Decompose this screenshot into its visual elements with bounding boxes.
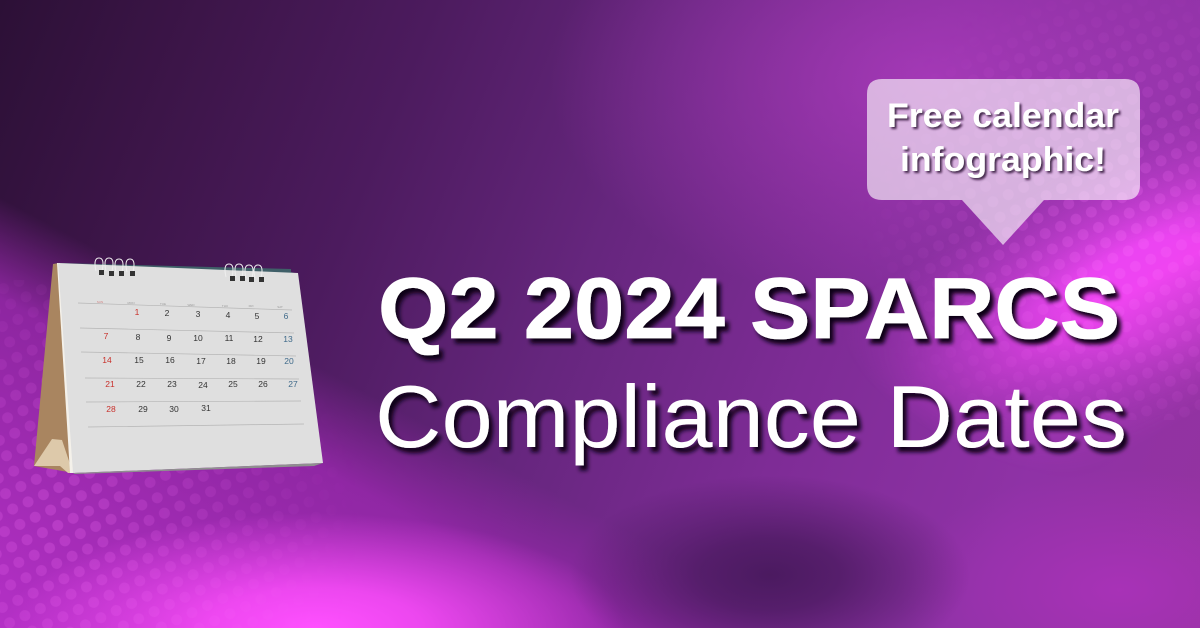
spiral bindings: [95, 258, 264, 282]
calendar dates: THU: [222, 304, 228, 308]
calendar dates: 3: [196, 309, 201, 319]
grid lines: [78, 303, 304, 427]
calendar dates: 7: [104, 331, 109, 341]
calendar dates: 12: [253, 334, 263, 344]
calendar dates: 21: [105, 379, 115, 389]
calendar dates: FRI: [249, 304, 254, 308]
calendar dates: 28: [106, 404, 116, 414]
calendar dates: 6: [284, 311, 289, 321]
calendar dates: 24: [198, 380, 208, 390]
calendar dates: 8: [136, 332, 141, 342]
calendar dates: 15: [134, 355, 144, 365]
title line 2: Compliance Dates: [375, 367, 1127, 466]
calendar dates: 10: [193, 333, 203, 343]
calendar dates: 9: [167, 333, 172, 343]
calendar dates: 25: [228, 379, 238, 389]
calendar dates: 16: [165, 355, 175, 365]
calendar dates: MON: [128, 301, 134, 305]
calendar dates: 19: [256, 356, 266, 366]
callout: free calendar infographic: Free calendar: [887, 97, 1119, 135]
calendar dates: 22: [136, 379, 146, 389]
background magenta streak: [884, 133, 1200, 440]
calendar dates: SAT: [277, 305, 283, 309]
calendar dates: 14: [102, 355, 112, 365]
title line 1: Q2 2024 SPARCS: [378, 261, 1120, 357]
calendar dates: 13: [283, 334, 293, 344]
calendar dates: 11: [225, 333, 234, 343]
calendar dates: [97, 300, 298, 414]
callout: free calendar infographic: [867, 79, 1140, 245]
calendar dates: SUN: [97, 300, 103, 304]
calendar dates: 18: [226, 356, 236, 366]
calendar dates: 31: [201, 403, 211, 413]
calendar dates: 29: [138, 404, 148, 414]
calendar dates: TUE: [160, 302, 166, 306]
calendar dates: 23: [167, 379, 177, 389]
calendar dates: 20: [284, 356, 294, 366]
calendar dates: 27: [288, 379, 298, 389]
calendar dates: 30: [169, 404, 179, 414]
calendar dates: 4: [226, 310, 231, 320]
calendar dates: WED: [188, 303, 195, 307]
calendar dates: 26: [258, 379, 268, 389]
calendar dates: 5: [255, 311, 260, 321]
calendar page: [58, 263, 323, 473]
calendar dates: 1: [135, 307, 140, 317]
callout: free calendar infographic: infographic!: [900, 141, 1106, 179]
calendar back and stand: [34, 263, 298, 473]
calendar dates: 2: [165, 308, 170, 318]
calendar dates: 17: [196, 356, 206, 366]
icon: desk calendar: [34, 258, 323, 474]
